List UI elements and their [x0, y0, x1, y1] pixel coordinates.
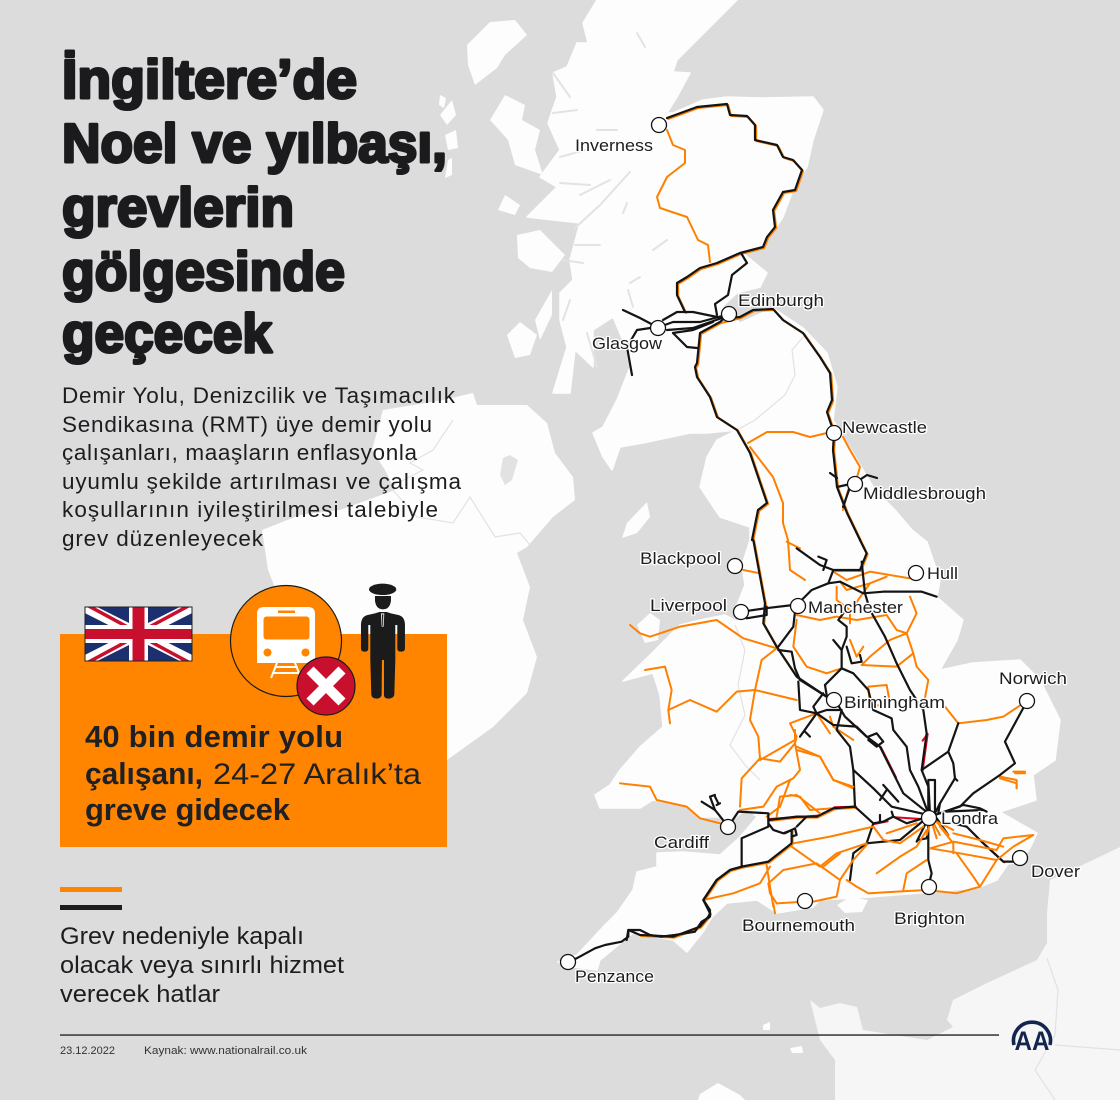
Birmingham: Birmingham [844, 693, 945, 712]
water inlets and lochs [553, 33, 667, 367]
footer [60, 1034, 999, 1057]
source: Kaynak: www.nationalrail.co.uk [144, 1045, 308, 1057]
lines: south-east, Kent and Penzance [568, 730, 1033, 962]
islands [439, 20, 868, 1100]
black lines: midlands, London radials, south-west [627, 540, 1027, 940]
land: Ireland [240, 393, 575, 760]
title: grevlerin [62, 176, 294, 238]
Londra [922, 809, 999, 828]
Hull [908, 564, 958, 583]
legend [60, 887, 344, 1008]
Dover [1012, 850, 1080, 881]
callout text: 24-27 Aralık’ta [213, 758, 421, 791]
Liverpool: Liverpool [650, 596, 727, 615]
Glasgow [592, 320, 666, 353]
legend text: verecek hatlar [60, 981, 220, 1008]
callout text: greve gidecek [85, 792, 291, 827]
intro text: koşullarının iyileştirilmesi talebiyle [62, 497, 438, 522]
lines: midlands, Wales and south-west [620, 540, 1027, 940]
lake [500, 455, 518, 485]
callout text: 40 bin demir yolu [85, 719, 343, 754]
Newcastle: Newcastle [842, 418, 927, 437]
Inverness [575, 118, 666, 155]
orange underlay of strike lines [641, 541, 868, 938]
panel: orange strike callout [60, 584, 447, 847]
Blackpool: Blackpool [640, 549, 721, 568]
Norwich [999, 669, 1067, 708]
Middlesbrough [848, 476, 986, 503]
orange lines: south-east [760, 730, 1033, 913]
rail network [568, 104, 1033, 962]
black lines: north [623, 104, 877, 540]
legend swatch: black line [60, 905, 122, 910]
Norwich: Norwich [999, 669, 1067, 688]
title: Noel ve yılbaşı, [62, 112, 447, 174]
Hull: Hull [927, 564, 958, 583]
icon: rail worker [361, 584, 405, 699]
title [62, 48, 447, 364]
legend text [60, 923, 344, 1008]
intro text: çalışanları, maaşların enflasyonla [62, 440, 417, 465]
Dover: Dover [1031, 862, 1080, 881]
icon: AA logo: AA [1014, 1026, 1050, 1056]
Brighton: Brighton [894, 909, 965, 928]
city markers and labels [560, 118, 1080, 986]
legend text: olacak veya sınırlı hizmet [60, 952, 344, 979]
orange underlay of strike lines: north [668, 105, 861, 541]
Edinburgh: Edinburgh [738, 291, 824, 310]
icon: red cross mark [297, 657, 355, 715]
date: 23.12.2022 [60, 1045, 115, 1057]
closed or limited lines in Scotland and the north [623, 104, 877, 580]
Glasgow: Glasgow [592, 334, 663, 353]
intro text: Sendikasına (RMT) üye demir yolu [62, 412, 432, 437]
icon: UK flag [85, 604, 192, 664]
Bournemouth: Bournemouth [742, 916, 855, 935]
orange lines: midlands and Wales [620, 542, 1025, 907]
Edinburgh [722, 291, 824, 322]
callout text [85, 719, 421, 827]
base map: land masses [240, 0, 1120, 1100]
Penzance: Penzance [575, 967, 654, 986]
intro text: uyumlu şekilde artırılması ve çalışma [62, 469, 461, 494]
Bournemouth [742, 894, 855, 935]
Penzance [560, 954, 654, 986]
borders [390, 335, 1120, 1100]
Middlesbrough: Middlesbrough [863, 484, 986, 503]
Brighton [894, 880, 965, 928]
Inverness: Inverness [575, 136, 653, 155]
Londra: Londra [941, 809, 999, 828]
Cardiff: Cardiff [654, 833, 709, 852]
intro text: Demir Yolu, Denizcilik ve Taşımacılık [62, 383, 456, 408]
orange lines: north [657, 130, 860, 580]
legend text: Grev nedeniyle kapalı [60, 923, 304, 950]
land: France [810, 847, 1120, 1100]
legend swatch: orange line [60, 887, 122, 892]
intro text [62, 383, 461, 551]
Manchester: Manchester [808, 598, 903, 617]
Blackpool [640, 549, 742, 574]
Newcastle [826, 418, 927, 440]
orange panel background [60, 634, 447, 847]
Liverpool [650, 596, 748, 620]
icon: train in circle [230, 586, 342, 696]
black line to Penzance [568, 867, 742, 962]
land: Great Britain [527, 0, 1060, 970]
intro text: grev düzenleyecek [62, 526, 264, 551]
title: gölgesinde [62, 240, 345, 302]
title: İngiltere’de [62, 48, 357, 110]
Cardiff [654, 820, 736, 852]
title: geçecek [62, 302, 272, 364]
callout text: çalışanı, [85, 756, 203, 791]
red sections [769, 677, 1004, 862]
